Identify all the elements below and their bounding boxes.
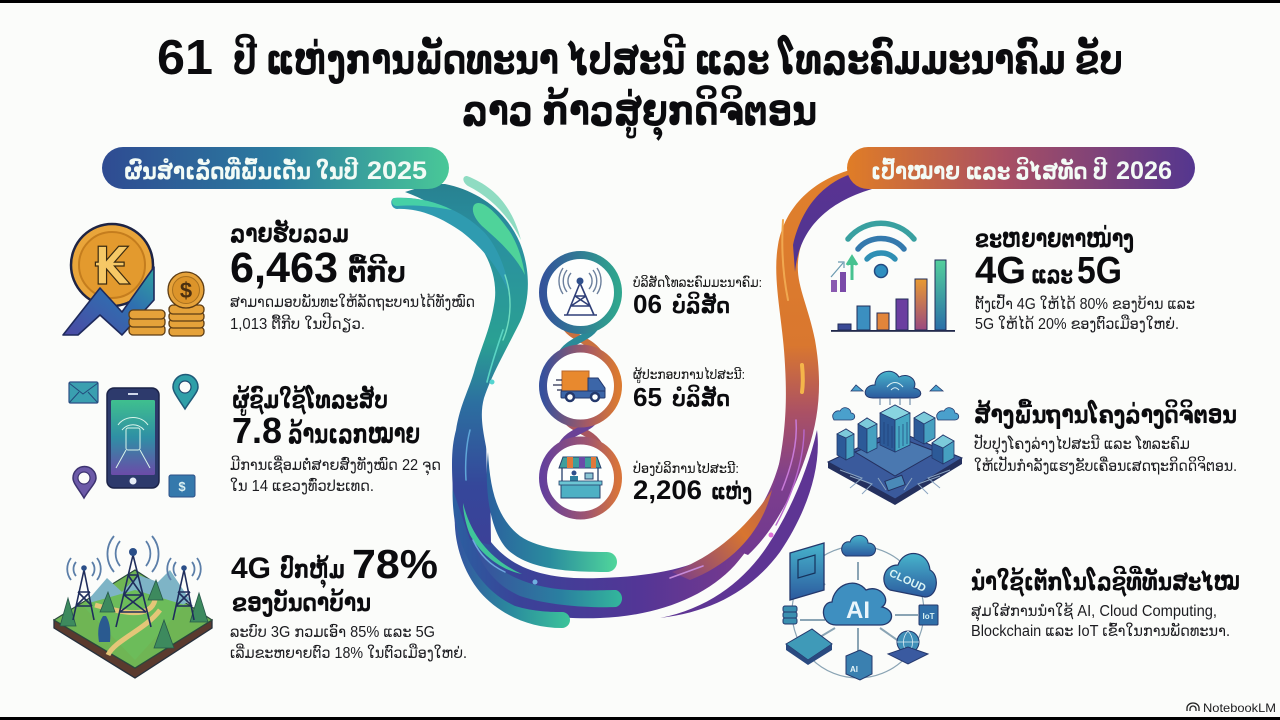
text: network expansion: 5G [1077, 250, 1122, 292]
text: total revenue: 1,013 ຕື້ກີບ ໃນປີດຽວ. [230, 312, 365, 333]
text: postal operators: ບໍລິສັດ [672, 385, 730, 411]
heading pill: achievements 2025 [102, 147, 449, 189]
ribbon: purple inner fold [793, 172, 872, 272]
icon: AI cloud hub [783, 535, 938, 680]
text: postal operators: ຜູ້ປະກອບການໄປສະນີ: [633, 367, 745, 383]
icon: smartphone with pins: $ [178, 479, 186, 494]
text: mobile users: ມີການເຊື່ອມຕໍ່ສາຍສົ່ງທັງໝົດ 22 ຈຸດ [230, 455, 441, 476]
text: telecom companies [633, 275, 762, 319]
icon: AI cloud hub: AI [850, 665, 858, 674]
heading pill: goals 2026 [847, 147, 1195, 189]
text: 4G coverage: ຂອງບັນດາບ້ານ [232, 588, 371, 617]
heading pill: goals 2026: ເປົ້າໝາຍ ແລະ ວິໄສທັດ ປີ [871, 156, 1108, 184]
stat: service points [543, 440, 752, 516]
icon: kip coin and coins: ₭ [94, 237, 131, 297]
title [157, 31, 1123, 142]
text: service points [633, 460, 752, 505]
circle chain connectors [560, 324, 601, 448]
heading pill: goals 2026: 2026 [1116, 157, 1172, 185]
city towers [837, 405, 954, 464]
panel: total revenue [63, 218, 475, 336]
text: total revenue [230, 218, 475, 333]
text: modern technology: Blockchain ແລະ IoT ເຂົ້າໃນການພັດທະນາ. [971, 621, 1230, 640]
icon: delivery truck in ring [543, 348, 618, 424]
text: postal operators [633, 367, 745, 412]
text: modern technology [971, 565, 1240, 640]
text: 4G coverage: 4G [231, 552, 271, 585]
ribbon: white gap line [488, 440, 600, 576]
text: service points: ແຫ່ງ [711, 479, 752, 504]
icon: shop in ring [543, 440, 618, 516]
text: telecom companies: ບໍລິສັດ [672, 292, 730, 318]
panel: network expansion [831, 223, 1195, 333]
panel: 4G coverage [54, 536, 467, 678]
ribbon: right body [730, 170, 860, 555]
text: telecom companies: ບໍລິສັດໂທລະຄົມມະນາຄົມ: [633, 275, 762, 290]
text: digital infrastructure [974, 398, 1237, 475]
text: total revenue: ສາມາດມອບພັນທະໃຫ້ລັດຖະບານໄດ້ທັງໝົດ [230, 292, 475, 311]
title: ລາວ ກ້າວສູ່ຍຸກດິຈິຕອນ [462, 84, 817, 142]
text: modern technology: ສຸມໃສ່ການນຳໃຊ້ AI, Cloud Computing, [971, 601, 1217, 622]
ribbon: green band from left [391, 198, 510, 295]
ribbon: mint upper stripe [463, 176, 521, 240]
text: mobile users: 7.8 [232, 410, 282, 451]
text: 4G coverage: ເລີ່ມຂະຫຍາຍຕົວ 18% ໃນຕົວເມືອງໃຫຍ່. [230, 643, 467, 662]
text: network expansion: 5G ໃຫ້ໄດ້ 20% ຂອງຕົວເມືອງໃຫຍ່. [975, 314, 1179, 333]
text: network expansion: ແລະ [1031, 261, 1073, 289]
text: telecom companies: 06 [633, 289, 662, 319]
ribbon: lower teal band [455, 512, 570, 628]
text: network expansion [975, 225, 1195, 333]
text: 4G coverage: ລະບົບ 3G ກວມເອົາ 85% ແລະ 5G [230, 622, 435, 641]
icon: isometric digital city [828, 371, 962, 505]
icon: towers on landscape [54, 536, 212, 678]
text: postal operators: 65 [633, 382, 662, 412]
text: mobile users: ລ້ານເລກໝາຍ [288, 418, 420, 449]
ribbon: left S body [405, 184, 528, 545]
text: digital infrastructure: ໃຫ້ເປັນກຳລັງແຮງຂັບເຄື່ອນເສດຖະກິດດິຈິຕອນ. [974, 454, 1237, 475]
title: 61 [157, 31, 213, 85]
icon: antenna in ring [543, 255, 618, 330]
stat: telecom companies [543, 255, 762, 330]
icon: kip coin and coins: $ [180, 278, 192, 303]
icon: kip coin and coins [63, 224, 204, 336]
stat: postal operators [543, 348, 745, 424]
icon: AI cloud hub: CLOUD [887, 567, 928, 595]
text: total revenue: ລາຍຮັບລວມ [230, 218, 349, 248]
text: 4G coverage: ປົກຫຸ້ມ [280, 553, 345, 589]
text: digital infrastructure: ປັບປຸງໂຄງລ່າງໄປສະນີ ແລະ ໂທລະຄົມ [974, 432, 1190, 455]
text: total revenue: ຕື້ກີບ [348, 254, 406, 289]
text: service points: 2,206 [633, 475, 702, 505]
panel: digital infrastructure [828, 371, 1237, 505]
ribbon: light green blob [473, 203, 525, 275]
ribbon: middle teal band [473, 540, 622, 607]
text: network expansion: ຕັ້ງເປົ້າ 4G ໃຫ້ໄດ້ 80% ຂອງບ້ານ ແລະ [975, 292, 1195, 313]
text: network expansion: 4G [975, 250, 1026, 292]
ribbon: orange streak [672, 490, 772, 580]
text: 4G coverage [230, 541, 467, 662]
ribbon: inner teal band [487, 452, 617, 572]
heading pill: achievements 2025: 2025 [367, 157, 427, 185]
icon: AI cloud hub: AI [846, 597, 870, 624]
panel: mobile users [69, 375, 441, 498]
text: total revenue: 6,463 [230, 244, 338, 292]
text: service points: ປ່ອງບໍລິການໄປສະນີ: [633, 460, 739, 476]
ribbon: right sliver [660, 430, 818, 618]
icon: wifi and bar chart [831, 223, 955, 332]
flowing ribbon connecting both sides [391, 170, 872, 628]
ribbon: green lower stripe [463, 503, 522, 574]
icon: AI cloud hub: IoT [922, 612, 935, 621]
panel: modern technology [783, 535, 1240, 680]
logo: NotebookLM watermark: NotebookLM [1203, 701, 1276, 715]
text: mobile users [230, 384, 441, 495]
text: 4G coverage: 78% [352, 541, 438, 587]
icon: smartphone with pins [69, 375, 198, 498]
text: mobile users: ໃນ 14 ແຂວງທົ່ວປະເທດ. [230, 476, 374, 495]
panel: centre stats [543, 255, 762, 516]
heading pill: achievements 2025: ຜົນສຳເລັດທີ່ພົ້ນເດັ່ນ ໃນປີ [124, 156, 359, 184]
ribbon: highlights [466, 220, 804, 578]
text: network expansion: ຂະຫຍາຍຕາໜ່າງ [975, 225, 1134, 253]
ribbon: bottom body [453, 430, 795, 618]
text: mobile users: ຜູ້ຊົມໃຊ້ໂທລະສັບ [232, 384, 388, 416]
